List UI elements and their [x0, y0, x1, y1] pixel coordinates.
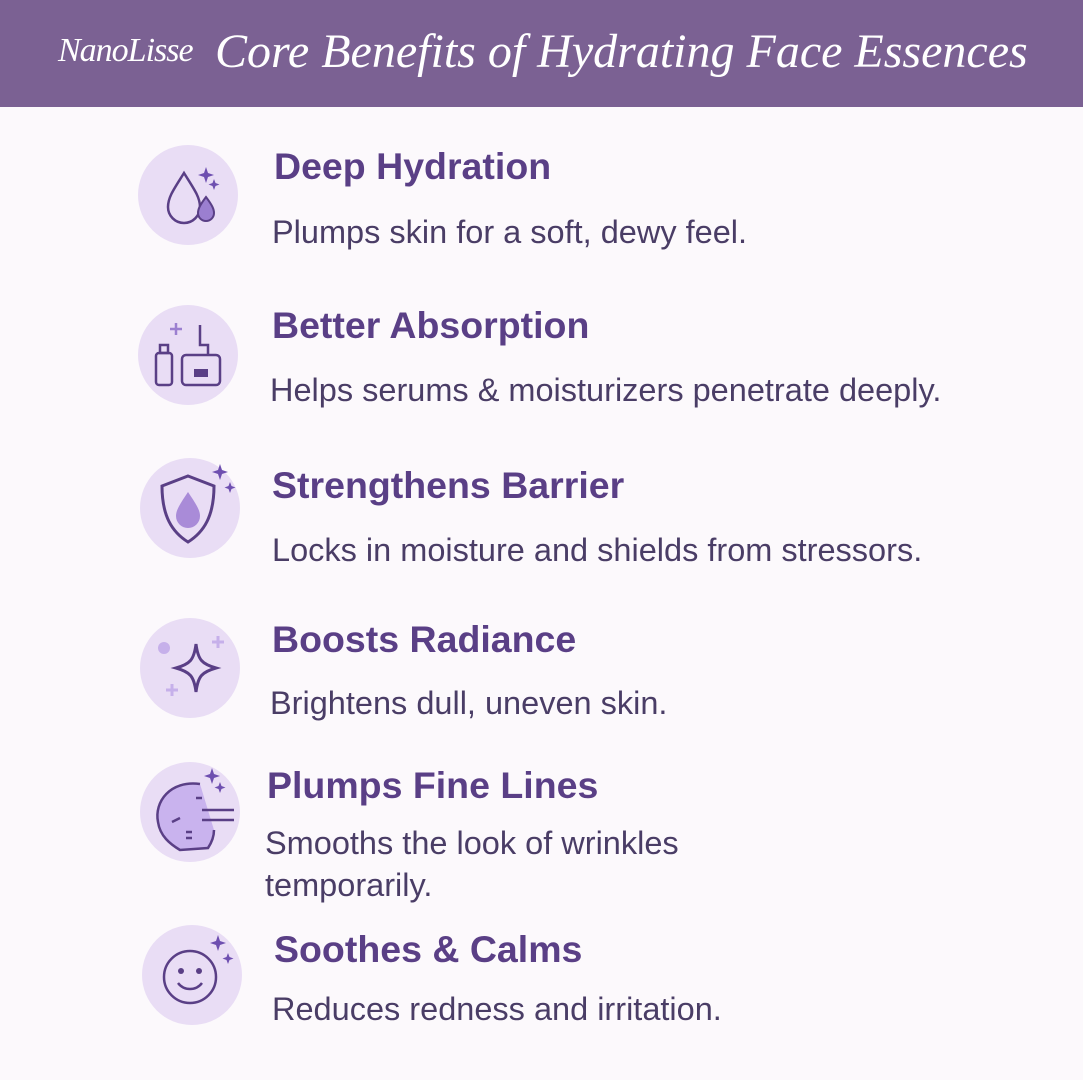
text 6: Reduces redness and irritation. [272, 991, 722, 1027]
icon: smiley [142, 925, 242, 1025]
text 3: Locks in moisture and shields from stressors. [272, 532, 922, 568]
logo: NanoLisse [58, 32, 193, 69]
heading 3: Strengthens Barrier [272, 464, 624, 506]
text 1: Plumps skin for a soft, dewy feel. [272, 214, 747, 250]
header bar [0, 0, 1083, 107]
icon: sparkle [140, 618, 240, 718]
heading 1: Deep Hydration [274, 145, 551, 187]
heading 4: Boosts Radiance [272, 618, 576, 660]
title: Core Benefits of Hydrating Face Essences [215, 25, 1028, 78]
icon: water drop [138, 145, 238, 245]
heading 2: Better Absorption [272, 304, 589, 346]
icon: face profile [140, 762, 240, 862]
text 5: Smooths the look of wrinkles [265, 825, 679, 861]
heading 6: Soothes & Calms [274, 928, 582, 970]
text 5 [265, 825, 679, 903]
icon: bottles [138, 305, 238, 405]
text 2: Helps serums & moisturizers penetrate deeply. [270, 372, 941, 408]
icon: shield [140, 458, 240, 558]
text 4: Brightens dull, uneven skin. [270, 685, 667, 721]
text 5: temporarily. [265, 867, 432, 903]
heading 5: Plumps Fine Lines [267, 764, 598, 806]
